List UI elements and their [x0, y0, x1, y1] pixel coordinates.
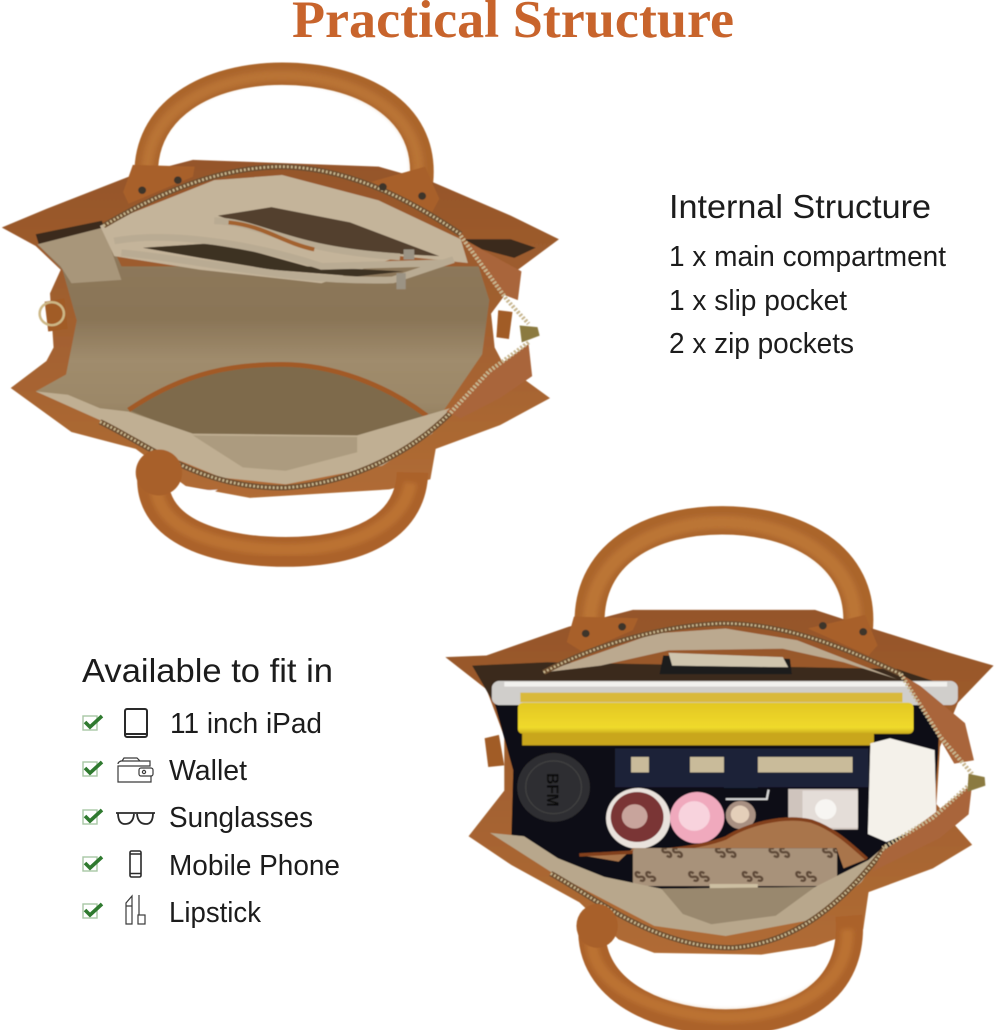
panel: available to fit in: [82, 652, 340, 929]
patterned pouch: [633, 848, 837, 889]
check icon: [83, 716, 102, 730]
side strap ring left: [45, 298, 68, 332]
text block: internal structure: [669, 188, 946, 360]
top zipper: [104, 167, 461, 234]
zipper end: [520, 325, 540, 342]
heading: internal structure: Internal Structure: [669, 188, 931, 225]
top handle: [590, 520, 858, 634]
top handle: [146, 74, 422, 182]
front flap: [36, 391, 450, 484]
label: Mobile Phone: [169, 850, 340, 882]
handle knot: [576, 904, 618, 948]
pocket piping: [114, 221, 454, 280]
photo: empty open bag: [2, 74, 559, 552]
handle gap: [186, 488, 218, 505]
left corner lining light: [37, 227, 121, 283]
front flap: [490, 833, 886, 936]
handle knot: [136, 450, 182, 495]
black bottle: BFM: [543, 773, 560, 807]
white paper: [868, 738, 936, 842]
check icon: [83, 857, 102, 871]
photo: filled open bag: [445, 520, 994, 1022]
rear pockets: [218, 207, 439, 256]
line: zip pockets: 2 x zip pockets: [669, 328, 854, 360]
bag body: [2, 160, 559, 498]
icon: lipstick and mascara: [126, 895, 145, 924]
black bottle: [517, 753, 590, 822]
check icon: [83, 810, 102, 824]
inner leather pocket: [579, 819, 867, 868]
front zipper: [100, 413, 450, 488]
icon: wallet: [118, 758, 153, 782]
side strap right: [496, 310, 512, 339]
icon: tablet: [125, 709, 147, 737]
heading: available to fit in: Available to fit in: [82, 652, 333, 689]
tablet: [492, 681, 958, 705]
top zipper: [544, 623, 901, 674]
label: Sunglasses: [169, 802, 313, 834]
rear band: [472, 662, 958, 703]
zipper end: [967, 774, 985, 792]
label: Lipstick: [169, 897, 262, 929]
front pocket: [129, 364, 427, 439]
handle tabs top: [123, 165, 439, 212]
interior: [494, 699, 940, 902]
zipper tape right: [446, 239, 532, 418]
navy wallet: [615, 748, 869, 799]
rear flap: [544, 628, 897, 679]
label: Wallet: [169, 755, 247, 787]
phone in rear pocket: [660, 653, 792, 674]
zipper pulls: [396, 249, 414, 289]
line: main compartment: 1 x main compartment: [669, 241, 946, 273]
rivets: [582, 622, 867, 637]
row: iPad: [83, 708, 322, 740]
icon: sunglasses: [116, 813, 155, 824]
bottom handle: [592, 916, 849, 1022]
line: slip pocket: 1 x slip pocket: [669, 285, 847, 317]
bag body: [445, 610, 994, 955]
front zipper: [551, 846, 886, 948]
row: mobile phone: [83, 850, 340, 882]
makeup jars: [606, 788, 858, 849]
bottom handle: [153, 472, 412, 552]
check icon: [83, 904, 102, 918]
check icon: [83, 762, 102, 776]
rear flap: [100, 175, 468, 283]
main compartment lining: [36, 227, 489, 469]
label: 11 inch iPad: [170, 708, 322, 740]
row: wallet: [83, 755, 247, 787]
row: lipstick: [83, 895, 262, 929]
zipper tape right: [872, 674, 974, 872]
rivets: [138, 176, 426, 200]
icon: phone: [130, 851, 141, 877]
handle tabs: [567, 615, 877, 655]
side strap left: [485, 735, 504, 767]
row: sunglasses: [83, 802, 313, 834]
yellow folder: [518, 703, 914, 745]
rim shadow: [36, 221, 536, 258]
